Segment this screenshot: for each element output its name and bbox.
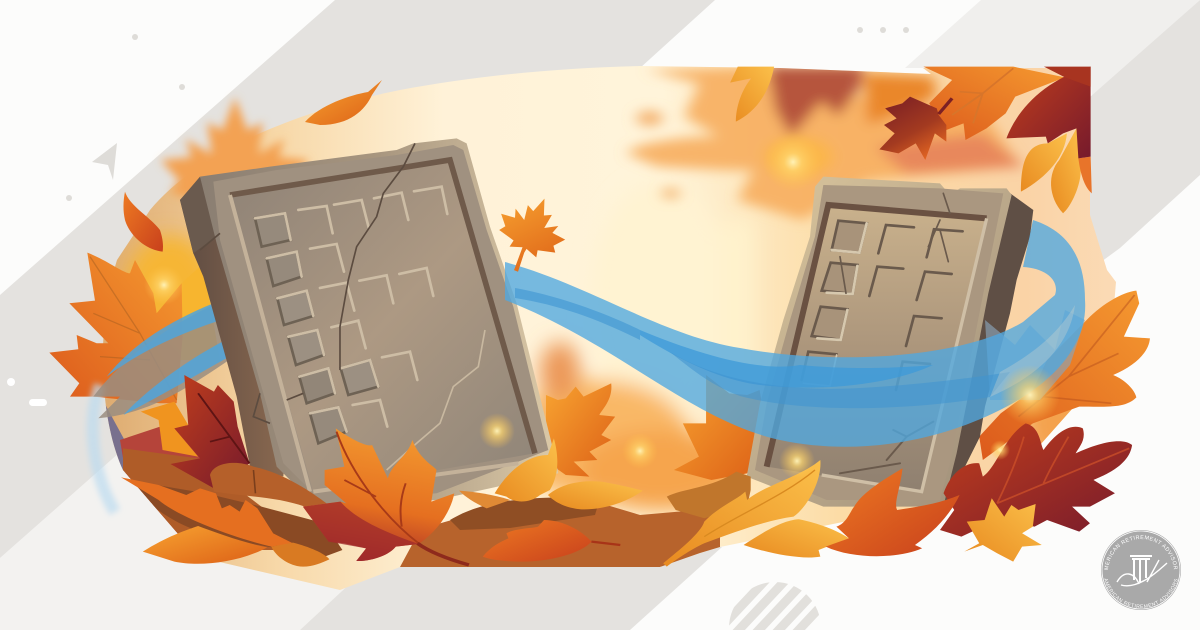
leaf: red-orange falling [123,192,163,252]
stone face [747,177,1012,507]
leaf: large front maple [303,428,454,561]
leaf: red bottom [483,520,591,562]
cracks [200,143,485,470]
frame [767,205,987,467]
top-right leaf cluster [730,67,1092,213]
leaf: orange fan [923,67,1065,140]
leaf: dark red [170,375,250,488]
leaf: lower orange [143,526,267,564]
inner panel [230,160,535,492]
translucent grey leaf [985,310,1085,400]
leaf: yellow centre [495,438,557,501]
leaf: orange mid [744,519,849,558]
leaf: brown curled [667,472,751,518]
small maple leaf centre [483,186,577,284]
blurred forest [125,180,1125,510]
leaf pile bottom right [663,423,1132,567]
leaf: dark red [1006,67,1091,158]
leaf: dark red oak [940,423,1132,537]
carved marks [255,187,447,443]
leaf: large left maple [49,253,183,403]
frame [230,160,535,453]
left background leaves [49,192,220,403]
leaf: red-orange [826,468,960,556]
orange oak right [979,291,1150,460]
leaf: long orange [121,477,293,547]
leaf: brown [210,463,327,507]
leaf: yellow-orange behind [141,402,198,457]
ground left [106,405,130,478]
leaf: red maple [879,97,946,160]
striped half circle [729,582,819,630]
leaf: yellow hanging [1021,133,1067,192]
inner panel [767,205,987,492]
orange maple behind right tablet [674,375,765,480]
leaf: falling top [305,80,382,125]
left side [180,177,290,477]
stone tablet right [747,177,1033,507]
leaf: yellow top [730,67,774,122]
stone tablet left [180,138,558,510]
left ribbon [93,293,253,512]
decorative dots [7,27,909,406]
leaf pile bottom left [121,375,643,567]
glow points [144,132,1060,479]
orange oak behind centre [546,383,615,477]
dark side [907,188,1033,503]
stone face [200,138,558,510]
blurred maple upper left [161,97,309,259]
scene backdrop [90,60,1130,600]
ground centre [400,500,720,567]
carved marks [802,193,963,473]
leaf: tan small [459,491,510,508]
leaf: yellow right [548,481,643,509]
leaf: yellow behind [157,263,220,360]
leaf: yellow long [663,460,820,567]
logo badge: AMERICAN RETIREMENT ADVISORS [1104,578,1178,608]
leaf: yellow maple [964,498,1042,562]
blue ribbon [505,220,1085,447]
leaf: small orange [271,543,329,567]
logo badge: AMERICAN RETIREMENT ADVISORS [1104,535,1178,570]
